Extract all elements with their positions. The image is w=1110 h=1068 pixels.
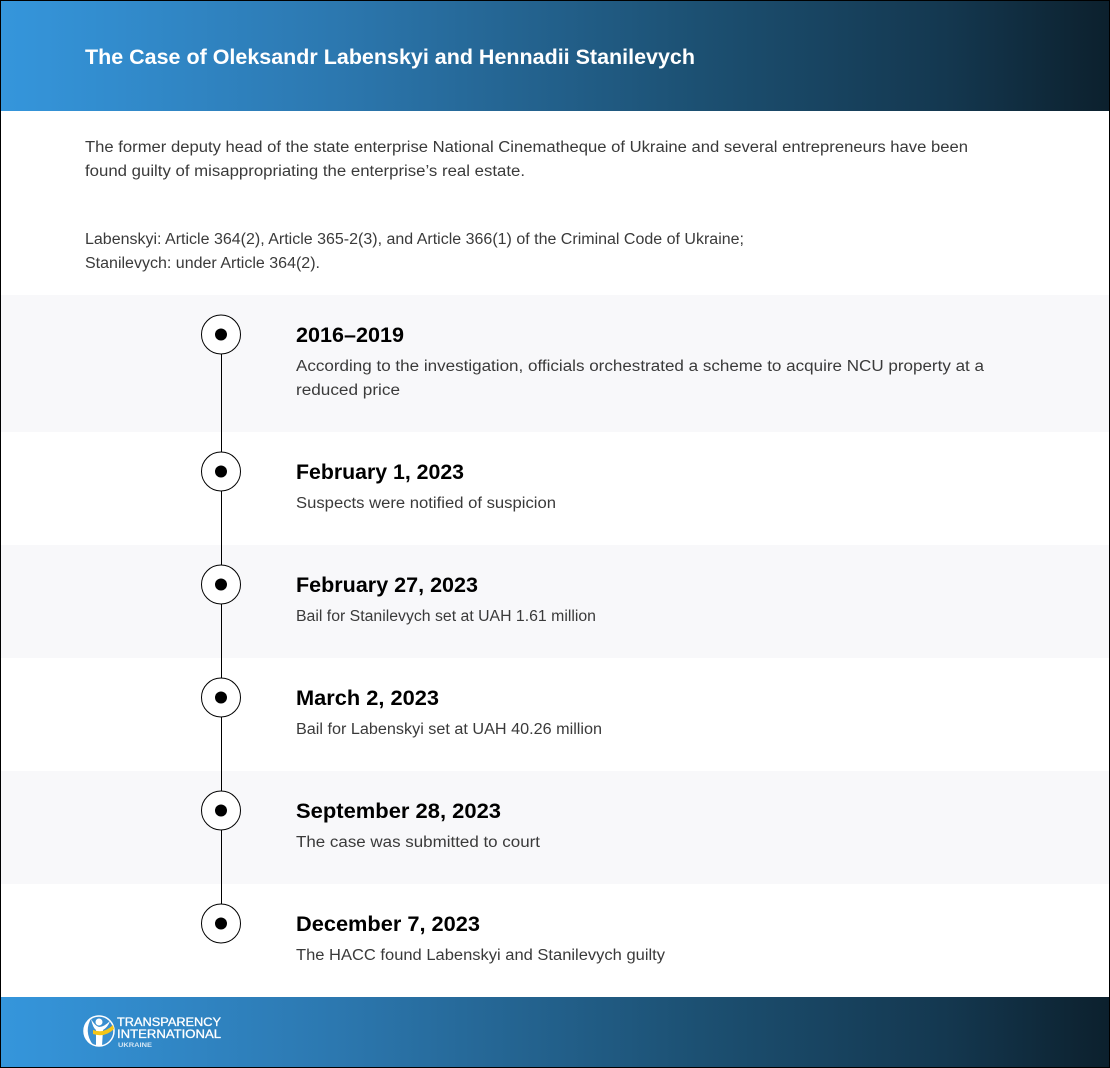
timeline event: February 27, 2023: [202, 565, 596, 625]
row background: September 28, 2023: [0, 771, 1110, 884]
timeline event: March 2, 2023: Bail for Labenskyi set at UAH 40.26 million: [296, 721, 602, 738]
timeline event: February 27, 2023: Bail for Stanilevych set at UAH 1.61 million: [296, 608, 596, 625]
timeline event: March 2, 2023: March 2, 2023: [296, 687, 439, 710]
timeline event: February 1, 2023: Suspects were notified of suspicion: [296, 495, 556, 512]
charges text block: Labenskyi: Article 364(2), Article 365-2(3), and Article 366(1) of the Criminal Code of Ukraine;: [85, 231, 744, 248]
timeline event: 2016–2019: According to the investigation, officials orchestrated a scheme to acquire NCU property at a: [296, 358, 984, 375]
logo: Transparency International Ukraine: INTERNATIONAL: [117, 1027, 221, 1041]
title: The Case of Oleksandr Labenskyi and Hennadii Stanilevych: [85, 46, 695, 69]
timeline event: February 1, 2023: February 1, 2023: [296, 461, 464, 484]
logo: Transparency International Ukraine: TRANSPARENCY: [117, 1015, 221, 1029]
footer banner: [0, 997, 1110, 1068]
header banner: [0, 0, 1110, 111]
timeline event: September 28, 2023: September 28, 2023: [296, 800, 501, 823]
charges text block: Stanilevych: under Article 364(2).: [85, 255, 320, 272]
icon: logo globe: [84, 1016, 114, 1046]
intro text block: [85, 139, 968, 180]
timeline event: December 7, 2023: December 7, 2023: [296, 913, 480, 936]
timeline event: September 28, 2023: [202, 791, 541, 851]
timeline event: December 7, 2023: [202, 904, 665, 964]
row background: 2016–2019: [0, 295, 1110, 432]
timeline event: December 7, 2023: The HACC found Labenskyi and Stanilevych guilty: [296, 947, 665, 964]
timeline event: 2016–2019: 2016–2019: [296, 324, 404, 347]
timeline event: March 2, 2023: [202, 678, 602, 738]
row background: February 27, 2023: [0, 545, 1110, 658]
logo: Transparency International Ukraine: UKRAINE: [118, 1042, 153, 1049]
timeline event: September 28, 2023: The case was submitted to court: [296, 834, 541, 851]
logo: Transparency International Ukraine: [84, 1015, 221, 1049]
intro text block: found guilty of misappropriating the enterprise’s real estate.: [85, 163, 525, 180]
timeline event: 2016–2019: [202, 315, 984, 399]
charges text block: [85, 231, 744, 272]
timeline connector line: [220, 334, 222, 924]
intro text block: The former deputy head of the state enterprise National Cinematheque of Ukraine and several entrepreneurs have been: [85, 139, 968, 156]
timeline event: February 1, 2023: [202, 452, 556, 512]
timeline event: February 27, 2023: February 27, 2023: [296, 574, 478, 597]
timeline event: 2016–2019: reduced price: [296, 382, 400, 399]
